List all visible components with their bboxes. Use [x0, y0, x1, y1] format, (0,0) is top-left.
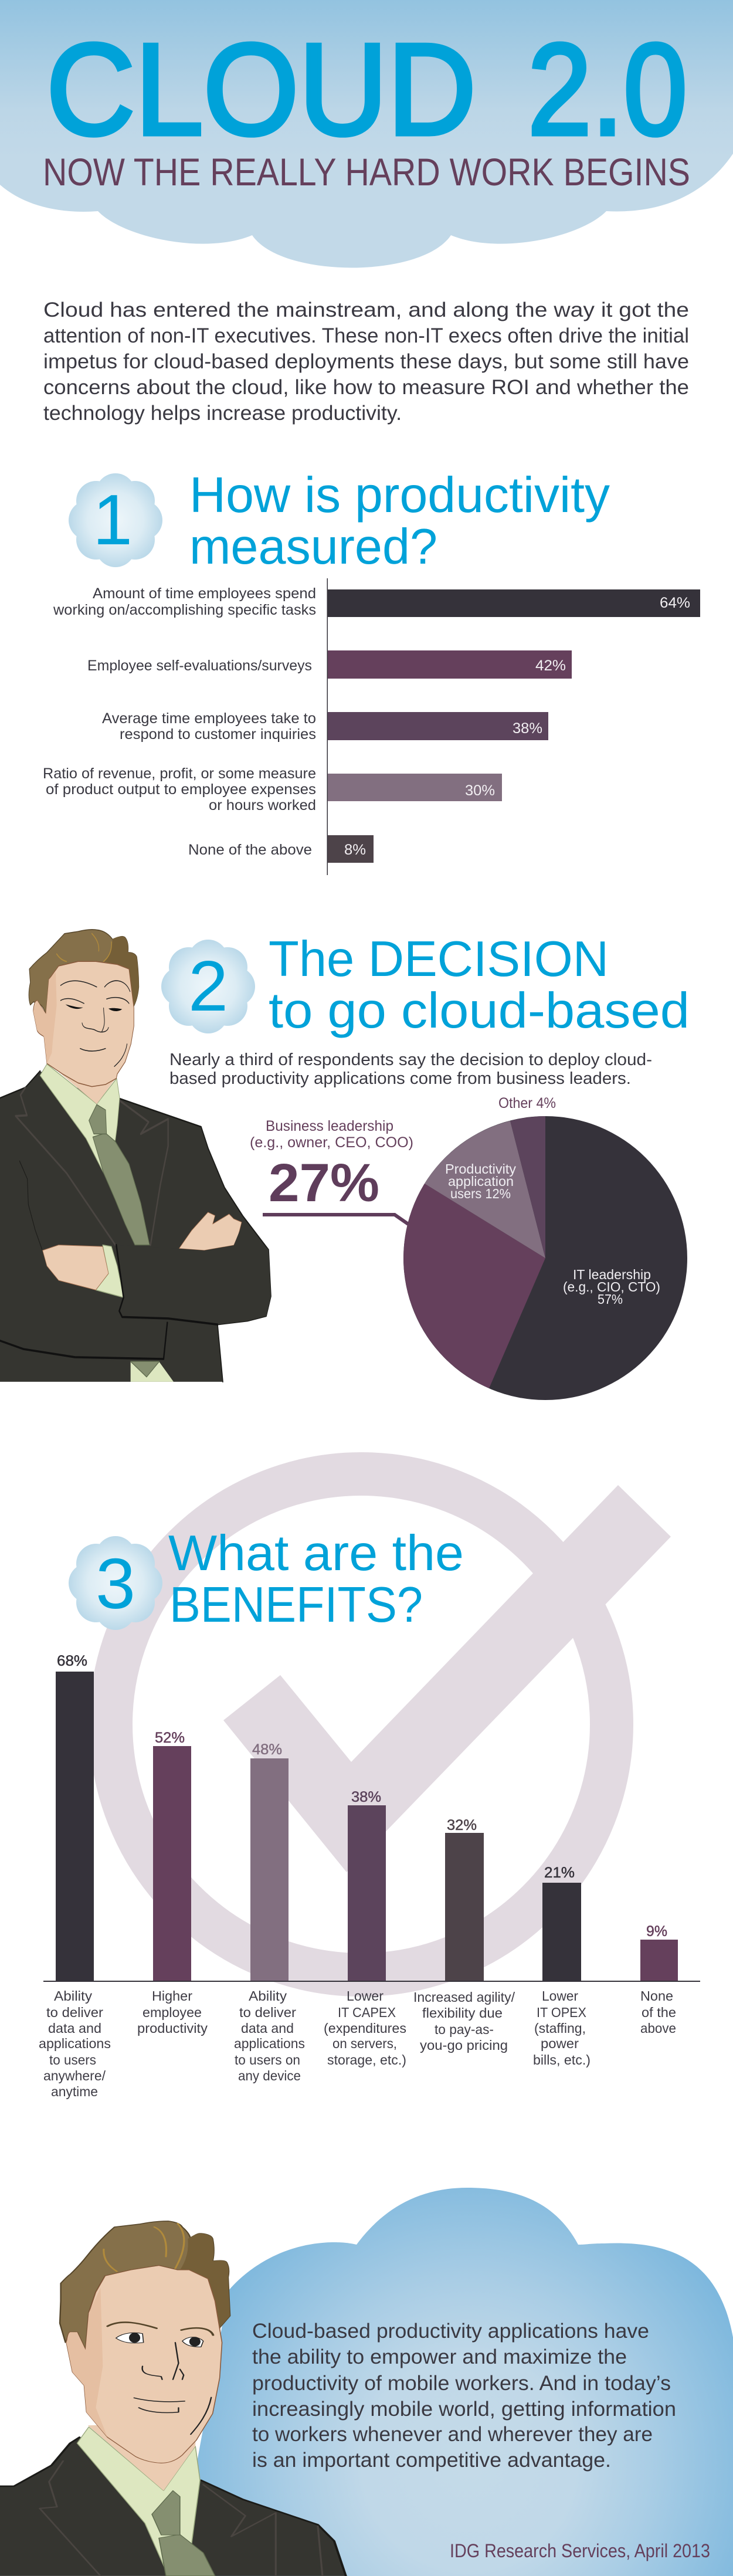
- bar chart: benefits: bills, etc.): [533, 2052, 591, 2067]
- pie chart: decision makers: (e.g., CIO, CTO): [563, 1279, 660, 1294]
- pie chart: decision makers: users 12%: [450, 1186, 511, 1201]
- bar chart: benefits: productivity: [137, 2021, 208, 2036]
- callout: business leadership 27%: (e.g., owner, CEO, COO): [250, 1134, 413, 1151]
- source credit: IDG Research Services, April 2013: [450, 2540, 710, 2561]
- closing text block: Cloud-based productivity applications have: [252, 2320, 649, 2343]
- heading: section 2: to go cloud-based: [269, 983, 690, 1039]
- bar chart: benefits: Higher: [152, 1988, 192, 2004]
- pie chart: decision makers: Other 4%: [498, 1095, 556, 1111]
- bar chart: benefits: Lower: [542, 1988, 578, 2004]
- icon: cloud badge 1: [69, 473, 162, 567]
- icon: cloud badge 3: [69, 1536, 162, 1630]
- bar chart: productivity measures: or hours worked: [209, 797, 316, 814]
- bar chart: benefits: storage, etc.): [327, 2052, 406, 2067]
- bar chart: benefits: Lower: [347, 1988, 384, 2004]
- bar chart: benefits: IT OPEX: [537, 2005, 586, 2020]
- bar chart: benefits: 38%: [351, 1789, 381, 1805]
- bar chart: benefits: 9%: [646, 1923, 667, 1940]
- illustration: businessman with crossed arms: [0, 930, 271, 1382]
- closing text block: is an important competitive advantage.: [252, 2449, 611, 2472]
- bar chart: benefits: 32%: [447, 1817, 477, 1833]
- heading: section 2: [269, 931, 690, 1039]
- icon: cloud badge 2: [161, 940, 255, 1033]
- callout: business leadership 27%: [250, 1118, 413, 1224]
- intro text block: attention of non-IT executives. These non-IT execs often drive the initial: [43, 324, 689, 347]
- section 2 text: [169, 1050, 652, 1088]
- bar chart: benefits: (staffing,: [534, 2021, 586, 2036]
- bar chart: benefits: [39, 1653, 700, 2099]
- intro text block: technology helps increase productivity.: [43, 402, 402, 425]
- bar chart: productivity measures: Amount of time employees spend: [93, 585, 316, 602]
- closing text block: increasingly mobile world, getting information: [252, 2398, 676, 2421]
- heading: section 3: [168, 1526, 464, 1633]
- bar chart: productivity measures: 64%: [660, 595, 690, 611]
- header cloud: [0, 0, 733, 267]
- intro text block: [43, 299, 689, 425]
- closing text block: [252, 2320, 676, 2472]
- bar chart: benefits: data and: [241, 2021, 294, 2036]
- bar chart: productivity measures: working on/accomplishing specific tasks: [53, 602, 316, 618]
- bar chart: productivity measures: of product output to employee expenses: [46, 781, 316, 798]
- bar chart: benefits: on servers,: [332, 2036, 397, 2051]
- bar chart: benefits: of the: [642, 2005, 676, 2020]
- bar chart: benefits: above: [640, 2021, 676, 2036]
- heading: section 3: What are the: [168, 1526, 464, 1581]
- bar chart: benefits: power: [541, 2036, 579, 2051]
- intro text block: concerns about the cloud, like how to measure ROI and whether the: [43, 376, 689, 399]
- bar chart: benefits: to deliver: [239, 2005, 296, 2020]
- bar chart: productivity measures: Ratio of revenue, profit, or some measure: [43, 765, 316, 782]
- bar chart: benefits: Increased agility/: [413, 1989, 515, 2005]
- bar chart: productivity measures: 30%: [465, 782, 495, 799]
- heading: section 2: The DECISION: [269, 931, 609, 987]
- pie chart: decision makers: 57%: [598, 1292, 623, 1307]
- bar chart: benefits: anywhere/: [43, 2068, 106, 2083]
- bar chart: benefits: None: [640, 1988, 673, 2004]
- bar chart: productivity measures: Employee self-evaluations/surveys: [87, 657, 312, 674]
- closing cloud: [176, 2188, 733, 2576]
- callout: business leadership 27%: 27%: [269, 1153, 379, 1213]
- bar chart: benefits: any device: [238, 2068, 301, 2083]
- bar chart: productivity measures: 8%: [344, 842, 366, 858]
- bar chart: benefits: applications: [234, 2036, 305, 2051]
- bar chart: benefits: Ability: [54, 1988, 92, 2004]
- bar chart: benefits: IT CAPEX: [338, 2005, 396, 2020]
- closing text block: the ability to empower and maximize the: [252, 2345, 627, 2368]
- bar chart: benefits: to deliver: [46, 2005, 103, 2020]
- title: CLOUD: [46, 17, 476, 162]
- bar chart: benefits: you-go pricing: [420, 2038, 508, 2053]
- bar chart: benefits: anytime: [51, 2084, 98, 2099]
- heading: section 1: How is productivity: [189, 467, 610, 523]
- bar chart: benefits: Ability: [249, 1988, 287, 2004]
- callout: business leadership 27%: Business leadership: [266, 1118, 393, 1134]
- bar chart: benefits: to users on: [235, 2052, 300, 2067]
- title: 2.0: [528, 17, 687, 162]
- section 2 text: Nearly a third of respondents say the decision to deploy cloud-: [169, 1050, 652, 1069]
- heading: section 1: measured?: [189, 519, 437, 575]
- bar chart: productivity measures: 38%: [513, 720, 542, 737]
- bar chart: benefits: 48%: [252, 1741, 282, 1758]
- bar chart: productivity measures: Average time employees take to: [102, 710, 316, 727]
- closing text block: productivity of mobile workers. And in today’s: [252, 2372, 671, 2395]
- bar chart: benefits: (expenditures: [324, 2021, 406, 2036]
- bar chart: benefits: to pay-as-: [435, 2022, 494, 2037]
- pie chart: decision makers: application: [448, 1174, 514, 1189]
- illustration: smiling businessman: [0, 2221, 346, 2576]
- number 3: 3: [96, 1544, 135, 1623]
- pie chart: decision makers: [403, 1095, 687, 1400]
- bar chart: benefits: 68%: [57, 1653, 87, 1669]
- closing text block: to workers whenever and wherever they are: [252, 2423, 653, 2446]
- number 1: 1: [93, 480, 133, 560]
- background checkmark in circle: [111, 1474, 671, 1975]
- intro text block: impetus for cloud-based deployments these days, but some still have: [43, 350, 689, 373]
- bar chart: productivity measures: [43, 578, 700, 875]
- pie chart: decision makers: Productivity: [445, 1161, 517, 1177]
- intro text block: Cloud has entered the mainstream, and along the way it got the: [43, 299, 689, 321]
- bar chart: benefits: to users: [49, 2052, 96, 2067]
- bar chart: benefits: employee: [142, 2005, 202, 2020]
- bar chart: benefits: applications: [39, 2036, 111, 2051]
- bar chart: productivity measures: 42%: [535, 657, 566, 674]
- bar chart: benefits: flexibility due: [422, 2005, 503, 2021]
- bar chart: benefits: data and: [48, 2021, 101, 2036]
- heading: section 3: BENEFITS?: [169, 1577, 423, 1633]
- pie chart: decision makers: IT leadership: [573, 1267, 651, 1282]
- bar chart: benefits: 52%: [155, 1730, 185, 1746]
- bar chart: benefits: 21%: [544, 1865, 575, 1881]
- section 2 text: based productivity applications come from business leaders.: [169, 1069, 631, 1088]
- number 2: 2: [188, 946, 228, 1026]
- heading: section 1: [189, 467, 610, 575]
- bar chart: productivity measures: respond to customer inquiries: [120, 726, 316, 743]
- bar chart: productivity measures: None of the above: [188, 842, 312, 858]
